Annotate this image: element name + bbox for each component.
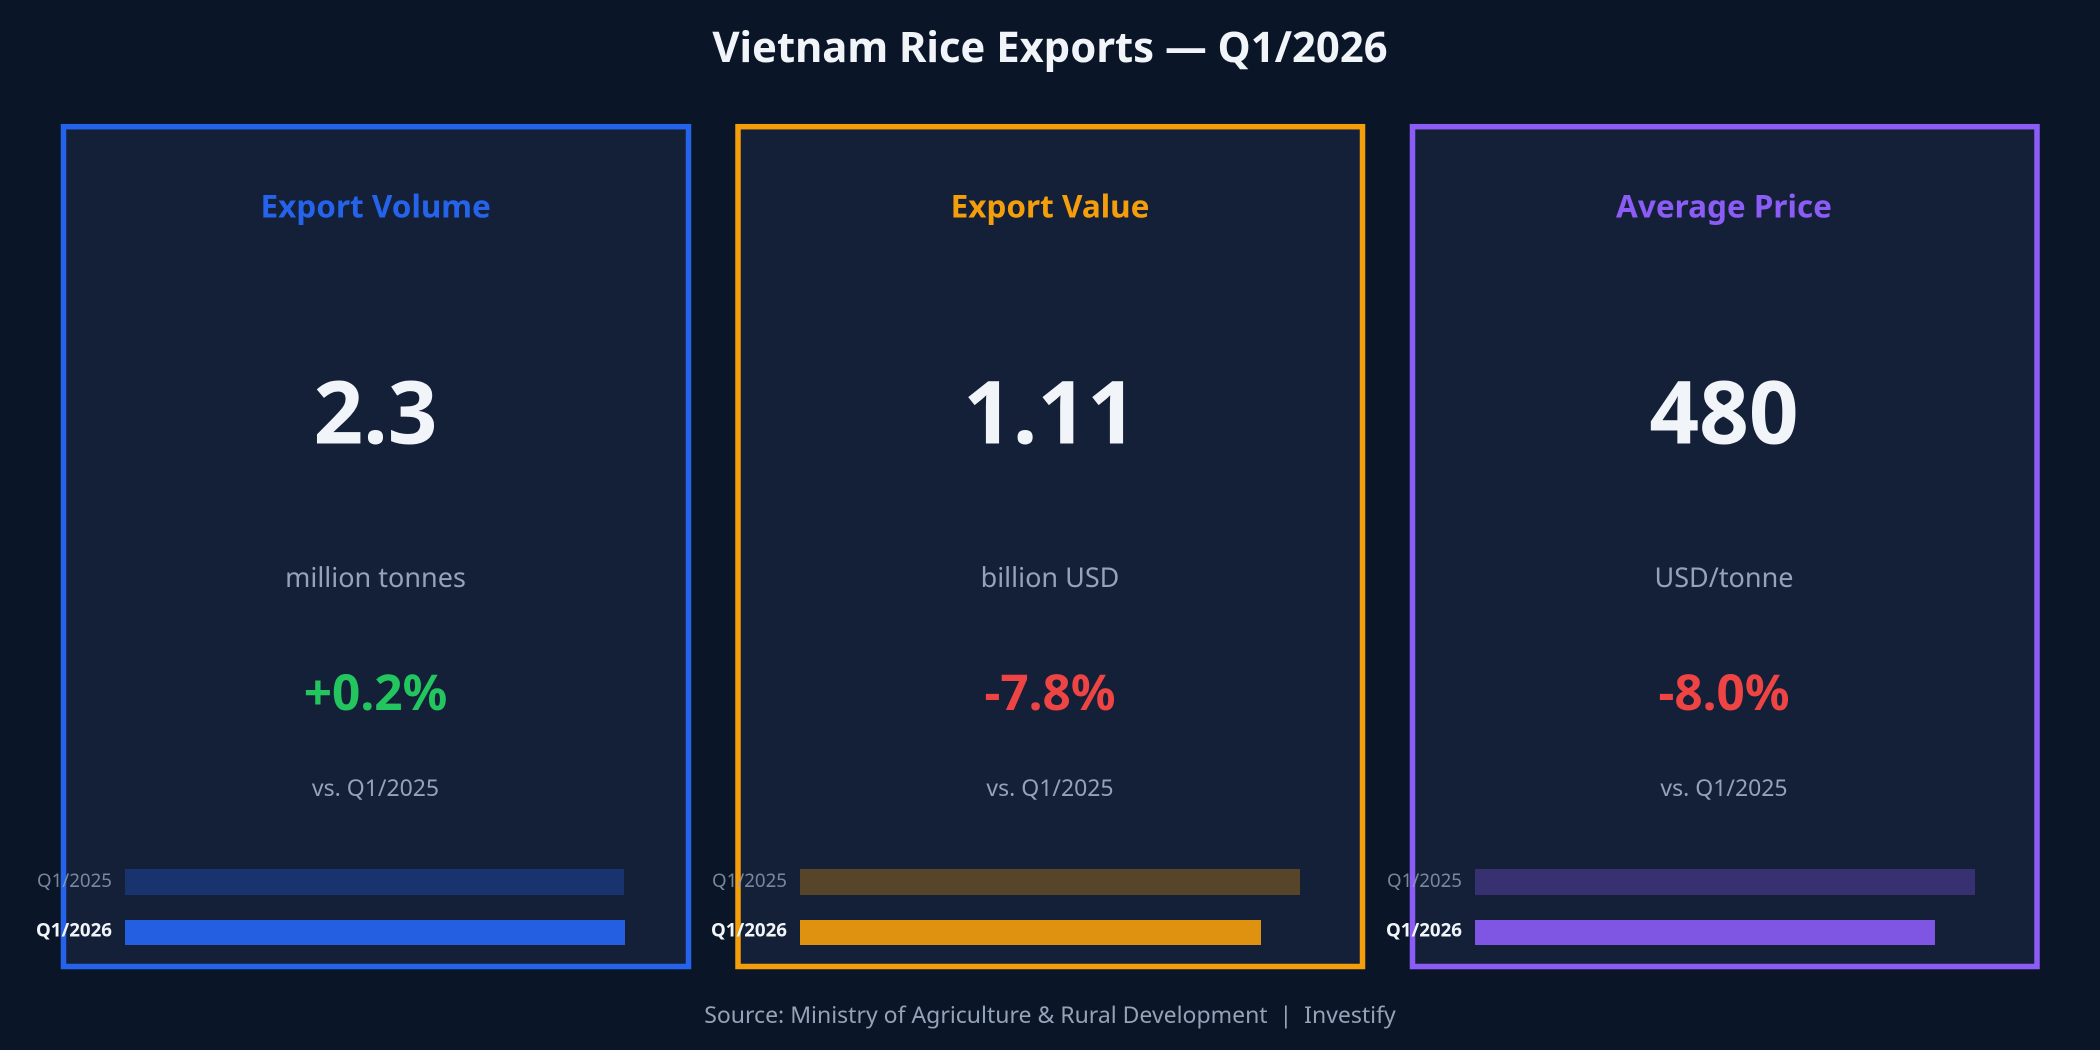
bar Q1/2026: [1475, 920, 1935, 945]
card frame: [738, 127, 1362, 966]
comparison note: vs. Q1/2025: [312, 771, 439, 803]
bar Q1/2025: [800, 869, 1300, 895]
label Q1/2026: Q1/2026: [36, 918, 112, 942]
change: value: -7.8%: [984, 657, 1116, 725]
panel: export volume: [36, 127, 688, 966]
bar Q1/2026: [125, 920, 625, 945]
big number: volume: 2.3: [314, 352, 437, 470]
bar Q1/2026: [800, 920, 1261, 945]
bar chart: volume: [36, 868, 625, 945]
bar Q1/2025: [1475, 869, 1975, 895]
bar Q1/2025: [125, 869, 624, 895]
panel: average price: [1386, 127, 2037, 966]
card frame: [64, 127, 688, 966]
heading: export volume: Export Volume: [261, 184, 491, 228]
big number: price: 480: [1649, 352, 1799, 470]
heading: average price: Average Price: [1616, 184, 1832, 228]
card frame: [1412, 127, 2037, 966]
label Q1/2026: Q1/2026: [711, 918, 787, 942]
comparison note: vs. Q1/2025: [1660, 771, 1788, 803]
unit: USD/tonne: USD/tonne: [1654, 558, 1794, 595]
panel: export value: [711, 127, 1362, 966]
heading: export value: Export Value: [951, 184, 1149, 228]
change: price: -8.0%: [1658, 657, 1790, 725]
title: Vietnam Rice Exports — Q1/2026: [712, 18, 1388, 75]
label Q1/2025: Q1/2025: [712, 868, 787, 893]
label Q1/2025: Q1/2025: [37, 868, 112, 893]
source line: Source: Ministry of Agriculture & Rural Development | Investify: [704, 998, 1396, 1030]
unit: million tonnes: million tonnes: [285, 558, 466, 595]
bar chart: price: [1386, 868, 1975, 945]
label Q1/2025: Q1/2025: [1387, 868, 1462, 893]
bar chart: value: [711, 868, 1300, 945]
unit: billion USD: billion USD: [981, 558, 1119, 595]
big number: value: 1.11: [963, 352, 1137, 470]
label Q1/2026: Q1/2026: [1386, 918, 1462, 942]
comparison note: vs. Q1/2025: [986, 771, 1114, 803]
change: volume: +0.2%: [304, 657, 447, 725]
